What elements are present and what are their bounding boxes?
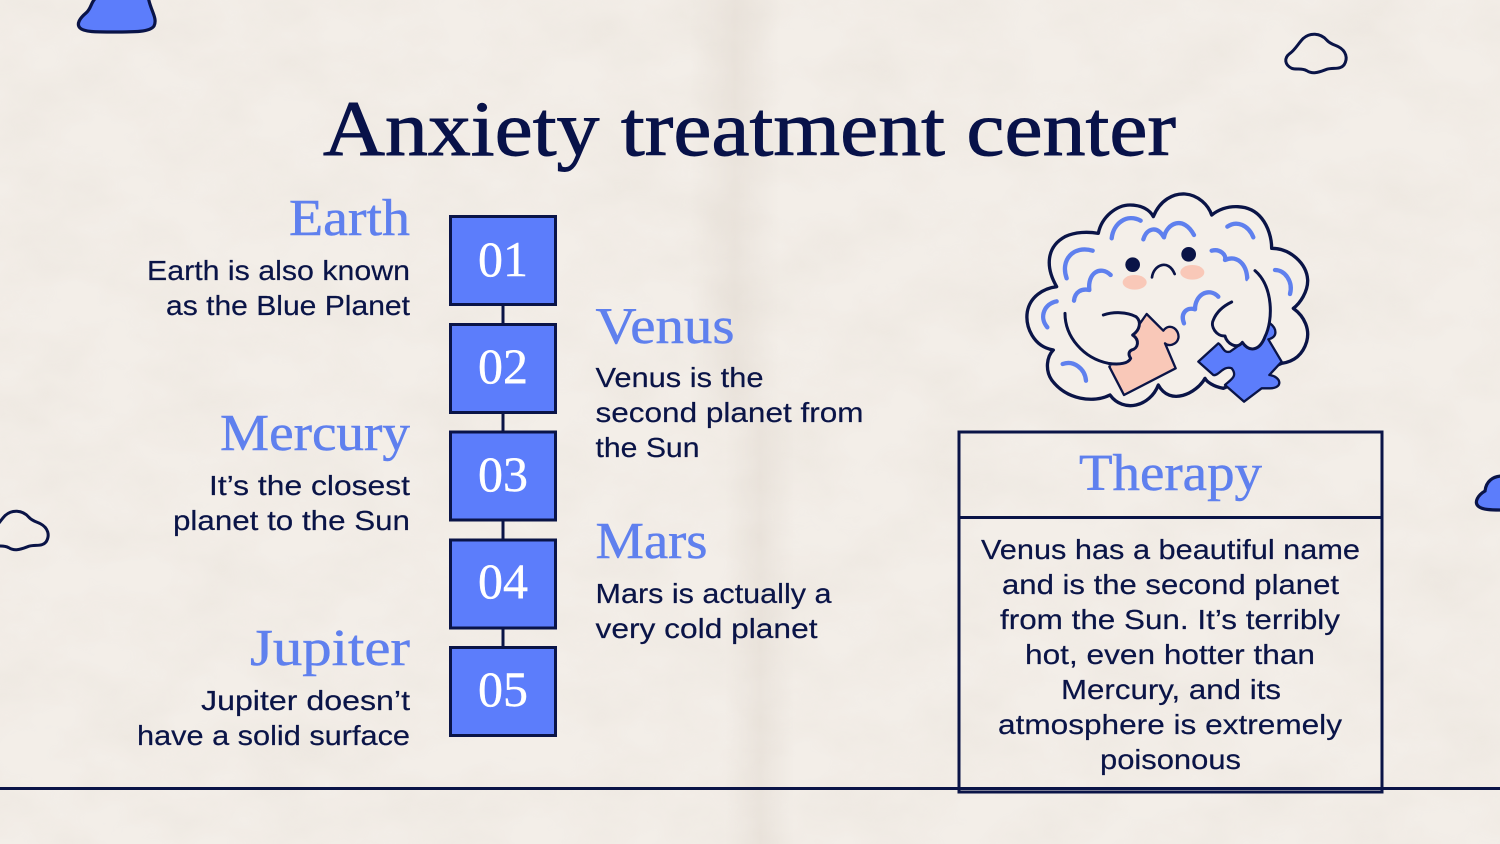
arm left (1065, 313, 1140, 365)
panel body text: hot, even hotter than (1025, 639, 1315, 670)
blue puzzle piece (1198, 323, 1282, 402)
cloud: blue right edge (1476, 476, 1500, 510)
arm right (1212, 271, 1270, 349)
item: Jupiter: Jupiter doesn’t (201, 685, 410, 716)
pink puzzle piece (1109, 314, 1179, 395)
panel body text: Mercury, and its (1061, 674, 1281, 705)
item: Venus: second planet from (596, 397, 864, 428)
item: Earth: Earth (289, 190, 410, 247)
box 04: 04 (478, 553, 528, 609)
blue squiggles (1043, 218, 1291, 381)
box 02: 02 (478, 338, 528, 394)
item: Jupiter (137, 620, 410, 751)
box 01 (450, 216, 556, 304)
panel: therapy (959, 432, 1382, 792)
panel body text: poisonous (1100, 744, 1241, 775)
item: Mars: very cold planet (596, 613, 818, 644)
numbered timeline (450, 216, 556, 736)
panel body text: atmosphere is extremely (998, 709, 1342, 740)
panel body text: Venus has a beautiful name (981, 534, 1360, 565)
item: Earth: Earth is also known (147, 255, 410, 286)
cloud: blue top left (78, 0, 155, 32)
cloud: outline top right (1286, 34, 1346, 73)
box 01: 01 (478, 231, 528, 287)
item: Venus: the Sun (596, 432, 700, 463)
box 05 (450, 648, 556, 736)
panel body text: from the Sun. It’s terribly (1000, 604, 1340, 635)
illustration: worried brain holding puzzle pieces (1027, 194, 1308, 406)
panel heading: Therapy (1079, 445, 1262, 502)
box 05: 05 (478, 661, 528, 717)
ground line (0, 787, 1500, 790)
item: Earth (147, 190, 410, 321)
item: Venus: Venus is the (596, 362, 764, 393)
item: Mercury: It’s the closest (209, 470, 410, 501)
cloud: outline left edge (0, 511, 48, 550)
box 02 (450, 324, 556, 412)
box 03: 03 (478, 446, 528, 502)
item: Jupiter: have a solid surface (137, 720, 410, 751)
panel body text (981, 534, 1360, 775)
box 04 (450, 540, 556, 628)
item: Mars (596, 513, 832, 644)
item: Mars: Mars is actually a (596, 578, 832, 609)
title: Anxiety treatment center (323, 85, 1176, 172)
item: Mercury (173, 405, 410, 536)
item: Venus (596, 298, 864, 463)
face (1125, 257, 1140, 272)
item: Mercury: Mercury (220, 405, 410, 462)
item: Earth: as the Blue Planet (166, 290, 410, 321)
item: Mars: Mars (596, 513, 708, 570)
item: Venus: Venus (596, 298, 734, 355)
panel body text: and is the second planet (1002, 569, 1339, 600)
item: Mercury: planet to the Sun (173, 505, 410, 536)
item: Jupiter: Jupiter (250, 620, 410, 677)
box 03 (450, 432, 556, 520)
